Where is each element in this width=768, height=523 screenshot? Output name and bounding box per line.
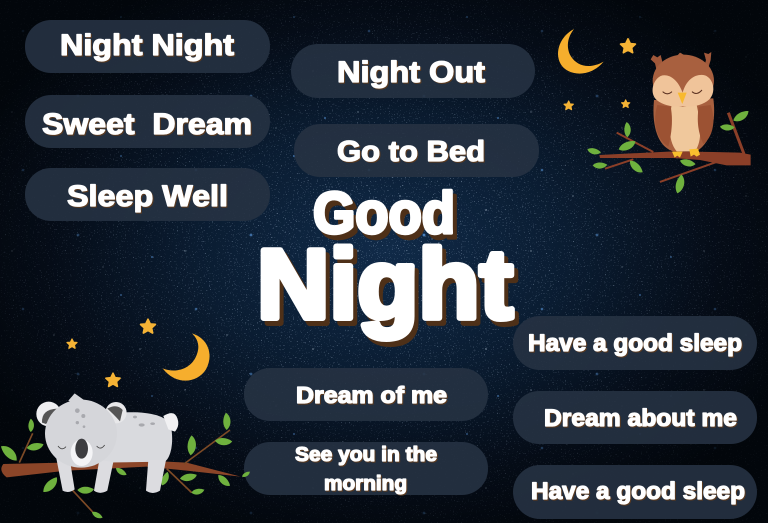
icon: small star left [564,101,573,110]
illustration: koala on branch with moon and stars [0,319,251,521]
branch [599,113,751,182]
pill: Night Night: Night Night [60,29,234,62]
pill: Dream about me: Dream about me [544,405,737,432]
icon: large star [621,39,635,53]
icon: mid star [106,373,120,386]
pill: Dream of me [244,368,488,421]
title: Good Night [257,181,513,339]
leaves [587,110,750,194]
pill: Have a good sleep (upper) [513,316,757,370]
pill: Have a good sleep (lower) [513,465,757,519]
pill: See you in the morning: See you in the [295,444,437,466]
pill: Dream about me [513,391,757,444]
icon: left star [67,339,77,348]
owl [651,52,714,158]
pill: Go to Bed: Go to Bed [337,136,485,168]
leaves [0,413,251,521]
title: Good Night: Good [313,181,455,246]
pill: Dream of me: Dream of me [296,382,447,408]
icon: crescent moon [163,333,210,381]
pill: See you in the morning: morning [324,473,407,495]
title: Good Night: Night [257,229,513,339]
branch [1,430,241,513]
koala [36,393,178,493]
pill: Sleep Well: Sleep Well [67,180,228,213]
pill: Sweet Dream: Sweet Dream [42,108,252,141]
pill: Night Night [25,20,270,73]
icon: crescent moon [558,29,604,74]
pill: Sleep Well [25,168,270,221]
pill: Have a good sleep (lower): Have a good sleep [531,478,745,505]
pill: Have a good sleep (upper): Have a good sleep [528,330,742,357]
pill: Go to Bed [294,124,539,177]
pill: See you in the morning [244,442,488,495]
pill: Night Out [291,44,535,98]
icon: small star right [621,100,630,108]
pill: Night Out: Night Out [337,56,485,89]
illustration: owl on branch with moon and stars [558,29,751,194]
icon: top star [141,319,155,333]
pill: Sweet Dream [25,95,270,148]
